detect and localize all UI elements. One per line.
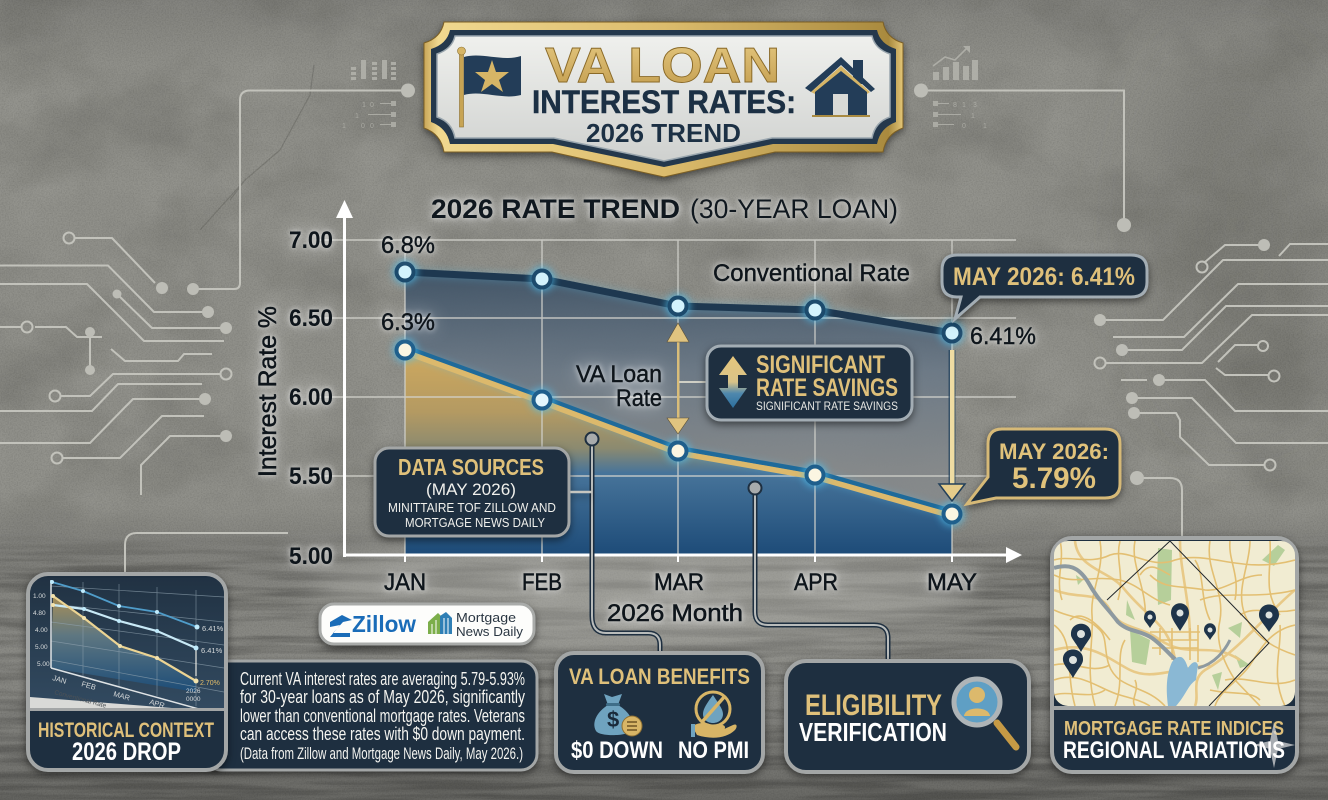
panel: summary text xyxy=(205,661,537,770)
panel: summary text: can access these rates with $0 down payment. xyxy=(240,724,525,744)
icon: money bag: $ xyxy=(607,707,619,732)
panel: eligibility verification xyxy=(786,661,1029,772)
logos: Zillow and Mortgage News Daily: Mortgage xyxy=(456,610,516,625)
value labels and series names: Conventional Rate xyxy=(713,260,910,287)
title line: VA LOAN: VA LOAN xyxy=(545,39,780,93)
map pins xyxy=(1063,603,1279,678)
y axis labels: 5.00 xyxy=(289,543,333,570)
callout: May 2026 VA rate: 5.79% xyxy=(1012,462,1096,495)
mini chart thumbnail: 4.80 xyxy=(33,610,46,617)
panel: summary text: (Data from Zillow and Mortgage News Daily, May 2026.) xyxy=(240,744,523,763)
panel: mortgage rate indices map: MORTGAGE RATE INDICES xyxy=(1064,718,1284,740)
panel: summary text: lower than conventional mortgage rates. Veterans xyxy=(240,706,525,726)
mini chart thumbnail: Conventional Rate xyxy=(53,689,107,710)
x axis labels xyxy=(384,569,977,596)
panel: eligibility verification: ELIGIBILITY xyxy=(805,689,942,722)
decorative sparkle xyxy=(1253,722,1295,768)
value labels and series names: Rate xyxy=(616,385,662,412)
mini chart thumbnail: 0000 xyxy=(186,696,201,703)
right circuit traces xyxy=(914,84,1328,540)
VA rate data points xyxy=(393,338,964,526)
mini data legend right: 8 xyxy=(953,102,957,109)
y axis title: Interest Rate % xyxy=(254,306,282,477)
left circuit traces xyxy=(0,84,415,575)
panel: historical context: HISTORICAL CONTEXT xyxy=(38,719,214,742)
plaque frame xyxy=(424,22,903,177)
panel: VA loan benefits xyxy=(556,653,763,772)
mini chart thumbnail: MAR xyxy=(112,689,132,703)
panel: data sources: (MAY 2026) xyxy=(426,480,516,499)
map xyxy=(1054,541,1295,706)
x axis labels: MAR xyxy=(654,569,704,596)
panel: mortgage rate indices map xyxy=(1052,538,1297,772)
y axis labels: 6.00 xyxy=(289,384,333,411)
panel: data sources: DATA SOURCES xyxy=(398,454,544,480)
value labels and series names: 6.3% xyxy=(381,309,435,336)
icon: house xyxy=(805,57,875,117)
panel: historical context xyxy=(28,574,226,770)
panel: summary text: for 30-year loans as of May 2026, significantly xyxy=(240,687,525,707)
panel: summary text: Current VA interest rates are averaging 5.79-5.93% xyxy=(240,669,525,689)
mini data legend left: 0 xyxy=(361,123,365,130)
panel: data sources: MORTGAGE NEWS DAILY xyxy=(405,516,546,530)
mini data legend left: 1 xyxy=(362,102,366,109)
line: VA loan rate xyxy=(405,347,952,516)
mini data legend right: 1 xyxy=(962,102,966,109)
icon: small bar and trend graphic right xyxy=(933,46,978,80)
conventional rate data points xyxy=(393,260,964,345)
mini chart thumbnail: 2026 xyxy=(186,688,201,695)
logos: Zillow and Mortgage News Daily: News Daily xyxy=(456,624,524,639)
mini chart thumbnail: 6.41% xyxy=(201,646,223,655)
arrow: May drop xyxy=(939,350,965,501)
mini data legend left: 0 xyxy=(370,123,374,130)
value labels and series names: 6.41% xyxy=(970,323,1036,350)
chart: 2026 rate trend xyxy=(254,194,1036,627)
mini data legend left xyxy=(342,101,396,130)
callout: significant rate savings: RATE SAVINGS xyxy=(756,374,898,402)
y axis labels: 5.50 xyxy=(289,463,333,490)
area fill: under VA rate xyxy=(405,350,952,555)
mini chart thumbnail: JAN xyxy=(51,673,68,686)
title plaque xyxy=(424,22,903,177)
mini chart thumbnail: 5.00 xyxy=(35,644,48,651)
chart heading: 2026 RATE TREND xyxy=(431,194,680,224)
icon: Zillow mark xyxy=(330,615,352,637)
x axis labels: JAN xyxy=(384,569,426,596)
mini chart thumbnail: 2.70% xyxy=(200,680,220,687)
callout: May 2026 VA rate: MAY 2026: xyxy=(999,439,1109,464)
callout: significant rate savings: SIGNIFICANT xyxy=(756,351,885,379)
mini chart thumbnail: APR xyxy=(148,697,166,710)
callout: May 2026 VA rate xyxy=(967,429,1120,504)
mini data legend right xyxy=(933,101,987,130)
chart heading: (30-YEAR LOAN) xyxy=(690,194,898,224)
mini chart thumbnail: 1.00 xyxy=(33,593,46,600)
x axis title: 2026 Month xyxy=(607,600,743,627)
arrow: rate gap double-headed xyxy=(667,323,707,434)
panel: data sources: MINITTAIRE TOF ZILLOW AND xyxy=(388,501,556,515)
title line: interest rates: INTEREST RATES: xyxy=(532,84,796,120)
x axis labels: MAY xyxy=(927,569,977,596)
icon: up and down arrows xyxy=(719,356,747,408)
grid lines xyxy=(316,240,1016,555)
icon: magnifier with user xyxy=(954,679,1016,747)
mini chart thumbnail xyxy=(30,578,224,716)
panel: historical context: 2026 DROP xyxy=(72,738,181,766)
logos: Zillow and Mortgage News Daily xyxy=(320,604,534,644)
mini chart thumbnail: 5.00 xyxy=(37,661,50,668)
icon: small bar graphic left xyxy=(351,60,396,80)
panel: data sources xyxy=(375,448,592,536)
mini data legend left: 1 xyxy=(355,113,359,120)
line: conventional rate xyxy=(405,272,952,333)
x axis labels: FEB xyxy=(522,569,562,596)
value labels and series names: VA Loan xyxy=(576,361,662,388)
mini data legend right: 1 xyxy=(971,113,975,120)
mini data legend right: 3 xyxy=(973,102,977,109)
panel: VA loan benefits: $0 DOWN xyxy=(571,737,663,764)
icon: no PMI xyxy=(691,692,737,738)
icon: flag with star xyxy=(458,47,521,127)
mini data legend right: 0 xyxy=(962,123,966,130)
mini data legend right: 1 xyxy=(983,123,987,130)
y axis labels: 7.00 xyxy=(289,227,333,254)
callout: May 2026 conventional rate: MAY 2026: 6.41% xyxy=(953,263,1135,291)
panel: VA loan benefits: NO PMI xyxy=(678,737,749,764)
value labels and series names: 6.8% xyxy=(381,232,435,259)
mini chart thumbnail: 4.00 xyxy=(35,627,48,634)
mini chart thumbnail: 6.41% xyxy=(202,624,224,633)
title line: 2026 trend: 2026 TREND xyxy=(586,118,741,148)
panel: eligibility verification: VERIFICATION xyxy=(799,717,947,747)
chart heading xyxy=(431,194,898,224)
logos: Zillow and Mortgage News Daily: Zillow xyxy=(352,611,416,637)
axes xyxy=(336,200,1022,563)
x axis labels: APR xyxy=(794,569,838,596)
callout: May 2026 conventional rate xyxy=(942,255,1147,319)
icon: money bag xyxy=(594,694,642,736)
connector: benefits xyxy=(586,432,660,654)
connector: eligibility xyxy=(748,482,888,662)
icon: Mortgage News Daily mark xyxy=(428,612,452,634)
mini data legend left: 0 xyxy=(370,102,374,109)
mini chart thumbnail: FEB xyxy=(80,679,97,692)
y axis labels xyxy=(289,227,333,570)
callout: significant rate savings xyxy=(707,346,912,420)
area fill: gap between rates xyxy=(405,272,952,514)
panel: VA loan benefits: VA LOAN BENEFITS xyxy=(569,664,750,689)
callout: significant rate savings: SIGNIFICANT RATE SAVINGS xyxy=(756,401,898,413)
y axis labels: 6.50 xyxy=(289,305,333,332)
value labels and series names xyxy=(381,232,1036,412)
mini data legend left: 1 xyxy=(342,123,346,130)
